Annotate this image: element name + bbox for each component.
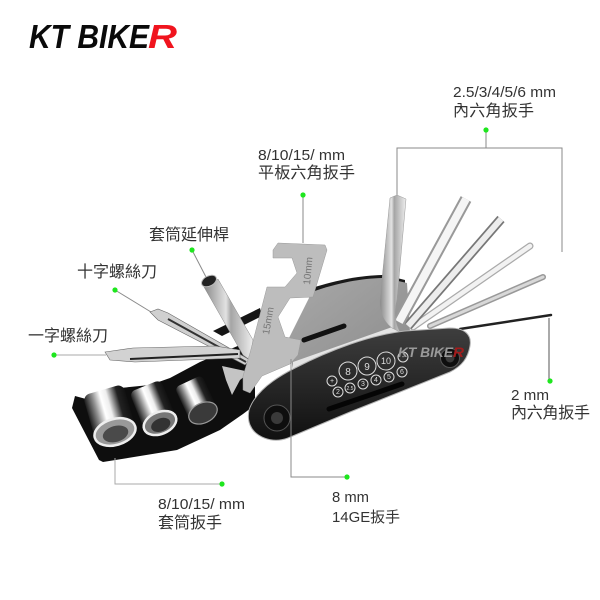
callout: 2.5-6 mm hex wrenches: 內六角扳手 — [453, 102, 534, 120]
flat hex wrench: 15mm — [261, 306, 277, 336]
callout: flat screwdriver — [28, 327, 108, 358]
metal clip — [222, 366, 250, 395]
multi-tool illustration — [72, 195, 551, 462]
back plate — [288, 275, 410, 372]
socket 1 — [83, 384, 139, 450]
socket 3 — [175, 375, 221, 428]
logo: KT BIKER: KT BIKE — [29, 18, 150, 55]
logo: KT BIKER: R — [148, 18, 177, 55]
handle slot — [329, 384, 402, 409]
dark band behind tools — [213, 308, 262, 336]
handle size markings: 10 — [381, 356, 391, 366]
handle size markings: - — [402, 354, 405, 361]
handle size markings: 5 — [387, 374, 391, 381]
socket extension — [200, 273, 253, 360]
callout: flat hex wrench: 8/10/15/ mm — [258, 148, 345, 164]
callout: socket wrench — [115, 458, 245, 532]
flat hex wrench — [243, 243, 327, 393]
socket 2 — [129, 380, 180, 440]
callout: 2 mm hex wrench: 2 mm — [511, 388, 549, 404]
callout: socket wrench: 套筒扳手 — [158, 514, 222, 532]
handle size markings: 6 — [400, 369, 404, 376]
handle size markings: 4 — [374, 377, 378, 384]
handle size markings: 3 — [361, 381, 365, 388]
phillips screwdriver — [150, 309, 250, 365]
callout: 2 mm hex wrench: 內六角扳手 — [511, 404, 590, 422]
callout: 2 mm hex wrench — [511, 318, 590, 422]
flat screwdriver — [105, 346, 240, 362]
callout: socket extension — [149, 226, 229, 277]
callout: 8 mm 14GE wrench: 8 mm — [332, 490, 369, 506]
callout: 2.5-6 mm hex wrenches — [397, 85, 562, 252]
callout: socket wrench: 8/10/15/ mm — [158, 497, 245, 513]
callout: socket extension: 套筒延伸桿 — [149, 226, 229, 244]
black handle — [248, 328, 470, 440]
callout: flat screwdriver: 一字螺絲刀 — [28, 327, 108, 345]
hex wrenches fan — [380, 195, 551, 332]
handle size markings: 2 — [336, 389, 340, 396]
handle logo: R — [453, 344, 465, 360]
handle size markings: 9 — [364, 362, 370, 373]
plate slot — [304, 326, 344, 340]
handle size markings: + — [330, 378, 334, 385]
callout: flat hex wrench: 平板六角扳手 — [258, 164, 355, 182]
callout: phillips screwdriver — [77, 263, 157, 312]
handle bolt: right — [440, 348, 460, 368]
callout: phillips screwdriver: 十字螺絲刀 — [77, 263, 157, 281]
handle size markings: 2.5 — [347, 386, 354, 392]
callout: flat hex wrench — [258, 148, 355, 243]
socket tray — [72, 345, 255, 462]
flat hex wrench: 10mm — [302, 257, 315, 285]
handle bolt: left — [264, 405, 290, 431]
handle size markings: 8 — [345, 367, 351, 378]
callout: 8 mm 14GE wrench — [291, 359, 400, 526]
callout: 2.5-6 mm hex wrenches: 2.5/3/4/5/6 mm — [453, 85, 556, 101]
callout: 8 mm 14GE wrench: 14GE扳手 — [332, 509, 400, 526]
handle size markings — [327, 352, 408, 397]
handle logo: KT BIKE — [398, 344, 454, 360]
